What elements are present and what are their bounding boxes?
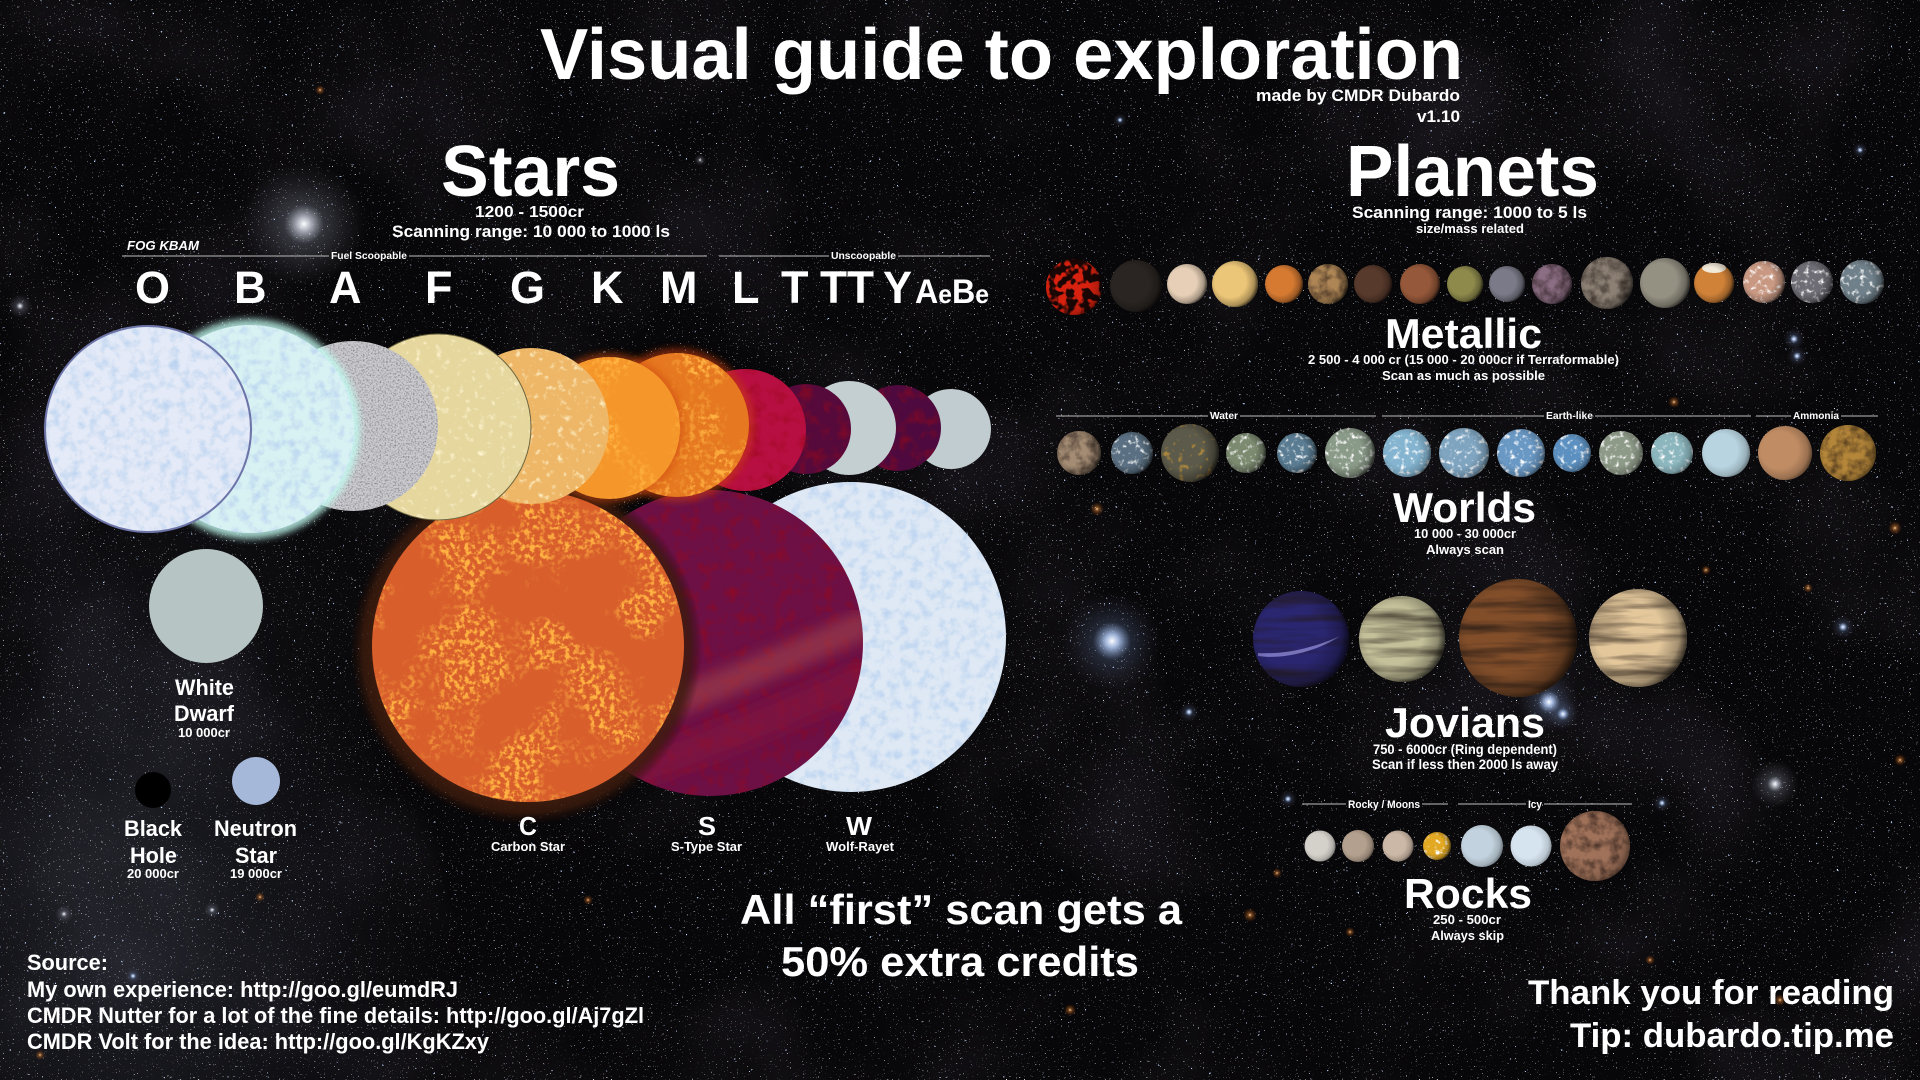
star: S-type [620, 490, 863, 796]
heading: Planets: Planets [1346, 132, 1599, 212]
rocks details: Always skip [1431, 928, 1504, 943]
planet: grey rock [1581, 257, 1633, 309]
spectral class letters: M [660, 262, 698, 313]
panel: stars [45, 132, 1006, 881]
metallic details: 2 500 - 4 000 cr (15 000 - 20 000cr if Terraformable) [1308, 352, 1619, 367]
label: white dwarf: 10 000cr [178, 726, 230, 740]
label: carbon star: Carbon Star [491, 839, 565, 854]
bracket: water: Water [1210, 411, 1238, 422]
icy: large brown [1560, 811, 1630, 881]
bracket: fuel scoopable: Fuel Scoopable [331, 251, 407, 262]
star: A [268, 341, 438, 511]
label: black hole: Black [124, 816, 183, 841]
star: C carbon [350, 473, 702, 825]
world: green grey [1226, 433, 1266, 473]
rocks details [1431, 912, 1504, 943]
world: earth-like blue [1383, 429, 1431, 477]
label: Wolf-Rayet: Wolf-Rayet [826, 839, 895, 854]
group: metallic planets [1046, 257, 1884, 315]
jovian: brown [1459, 579, 1577, 697]
spectral class letters: K [591, 262, 624, 313]
sources: Source: [27, 950, 108, 975]
sources: CMDR Nutter for a lot of the fine details: http://goo.gl/Aj7gZl [27, 1003, 644, 1028]
jovians details [1372, 741, 1558, 772]
jovian: blue [1253, 591, 1349, 687]
callout: first scan bonus: All “first” scan gets a [740, 886, 1183, 933]
bracket: ammonia [1756, 411, 1878, 422]
heading: Stars: Stars [441, 132, 620, 212]
spectral class letters: F [425, 262, 452, 313]
label: black hole: Hole [130, 843, 177, 868]
heading: Rocks: Rocks [1404, 870, 1532, 917]
world: earth-like teal [1651, 432, 1693, 474]
bracket: icy: Icy [1528, 799, 1543, 811]
star: G [453, 348, 609, 504]
label: Wolf-Rayet [826, 811, 895, 854]
thanks [1528, 974, 1894, 1055]
planet: khaki [1640, 258, 1690, 308]
bracket: unscoopable: Unscoopable [831, 251, 896, 262]
world: olive ocean [1161, 424, 1219, 482]
jovian: pale [1359, 596, 1445, 682]
star: AeBe [911, 389, 991, 469]
stars credits: 1200 - 1500cr [475, 204, 584, 221]
spectral class letters: T [781, 262, 808, 313]
star: Y [855, 385, 941, 471]
label: neutron star [214, 816, 297, 881]
star: F [345, 334, 531, 520]
label: Wolf-Rayet: W [846, 811, 872, 841]
world: tan [1057, 431, 1101, 475]
star: black hole [135, 772, 171, 808]
label: white dwarf: Dwarf [174, 701, 235, 726]
planet: salmon icy [1743, 261, 1785, 303]
bracket: rocky / moons: Rocky / Moons [1348, 799, 1420, 811]
credit [1256, 86, 1460, 126]
world: ammonia tan [1758, 426, 1812, 480]
planet: yellow [1212, 261, 1258, 307]
star: M [600, 348, 754, 502]
credit: v1.10 [1417, 107, 1460, 126]
world: earth-like ice [1702, 429, 1750, 477]
star: white dwarf [149, 549, 263, 663]
spectral class letters: TT [820, 262, 874, 313]
star: L [684, 369, 806, 491]
star: TT [802, 381, 896, 475]
label: S-type star: S-Type Star [671, 839, 742, 854]
credit: made by CMDR Dubardo [1256, 86, 1460, 105]
rock: taupe [1342, 830, 1374, 862]
spectral class letters: G [510, 262, 545, 313]
planets note: size/mass related [1416, 221, 1524, 236]
label: carbon star: C [519, 811, 537, 841]
label: black hole [124, 816, 183, 881]
planets scanning range: Scanning range: 1000 to 5 ls [1352, 203, 1587, 222]
stars scanning range: Scanning range: 10 000 to 1000 ls [392, 222, 670, 241]
sources: My own experience: http://goo.gl/eumdRJ [27, 977, 458, 1002]
world: sage [1325, 428, 1375, 478]
planet: grey icy [1791, 261, 1833, 303]
jovians details: Scan if less then 2000 ls away [1372, 756, 1558, 772]
label: carbon star [491, 811, 565, 854]
metallic details: Scan as much as possible [1382, 368, 1545, 383]
world: earth-like tan [1599, 431, 1643, 475]
panel: planets [1046, 132, 1884, 943]
sources [27, 950, 644, 1054]
rocks details: 250 - 500cr [1433, 912, 1501, 927]
rock: beige [1382, 830, 1414, 862]
group: jovian planets [1253, 579, 1687, 697]
world: earth-like deep [1497, 429, 1545, 477]
world: earth-like mixed [1439, 428, 1489, 478]
icy: pale blue [1510, 826, 1552, 866]
spectral class letters: L [732, 262, 760, 313]
label: white dwarf: White [175, 675, 234, 700]
label: black hole: 20 000cr [127, 867, 179, 881]
group: rocks [1304, 811, 1630, 881]
world: ammonia gold [1820, 425, 1876, 481]
icy: blue white [1461, 825, 1503, 867]
spectral class letters: B [234, 262, 266, 313]
planet: orange [1265, 265, 1303, 303]
bracket: earth-like: Earth-like [1546, 411, 1593, 422]
planet: dark brown [1354, 265, 1392, 303]
worlds details [1414, 526, 1516, 557]
planet: mauve [1532, 264, 1572, 304]
planet: dark [1110, 260, 1162, 312]
spectral class letters: Y [883, 262, 912, 313]
planet: ice-capped orange [1694, 263, 1734, 303]
star: B [140, 319, 360, 539]
planet: rust [1400, 264, 1440, 304]
spectral class letters [135, 262, 989, 313]
planet: brown [1308, 264, 1348, 304]
group: worlds planets [1057, 424, 1876, 482]
star: K [534, 353, 684, 503]
label: neutron star: Star [235, 843, 277, 868]
callout: first scan bonus: 50% extra credits [781, 938, 1139, 985]
world: blue [1277, 433, 1317, 473]
star: T [761, 384, 851, 474]
sources: CMDR Volt for the idea: http://goo.gl/KgKZxy [27, 1029, 490, 1054]
star: O [45, 326, 251, 532]
world: slate ocean [1111, 432, 1153, 474]
worlds details: 10 000 - 30 000cr [1414, 526, 1516, 541]
title: Visual guide to exploration [540, 15, 1463, 95]
callout: first scan bonus [740, 886, 1183, 985]
spectral class letters: AeBe [915, 273, 989, 311]
world: earth-like small [1553, 434, 1591, 472]
label: neutron star: Neutron [214, 816, 297, 841]
spectral class letters: A [329, 262, 362, 313]
planet: pale rock [1167, 264, 1207, 304]
planet: olive [1447, 266, 1483, 302]
planet: lava [1046, 259, 1102, 315]
label: neutron star: 19 000cr [230, 867, 282, 881]
spectral class letters: O [135, 262, 170, 313]
star: neutron [232, 757, 280, 805]
rock: pale grey [1304, 830, 1336, 862]
planet: grey violet [1489, 266, 1525, 302]
star: W Wolf-Rayet [696, 482, 1006, 792]
metallic details [1308, 352, 1619, 383]
heading: Worlds: Worlds [1393, 484, 1536, 531]
rock: sulphur [1423, 832, 1451, 860]
heading: Metallic: Metallic [1385, 310, 1542, 357]
label: S-type star [671, 811, 742, 854]
bracket: ammonia: Ammonia [1793, 411, 1839, 422]
heading: Jovians: Jovians [1385, 699, 1545, 746]
thanks: Thank you for reading [1528, 974, 1894, 1012]
FOG KBAM note: FOG KBAM [127, 238, 200, 253]
jovian: sand [1589, 589, 1687, 687]
planet: slate icy [1840, 260, 1884, 304]
worlds details: Always scan [1426, 542, 1504, 557]
jovians details: 750 - 6000cr (Ring dependent) [1373, 741, 1557, 757]
thanks: Tip: dubardo.tip.me [1570, 1017, 1894, 1055]
label: S-type star: S [698, 811, 716, 841]
label: white dwarf [174, 675, 235, 740]
